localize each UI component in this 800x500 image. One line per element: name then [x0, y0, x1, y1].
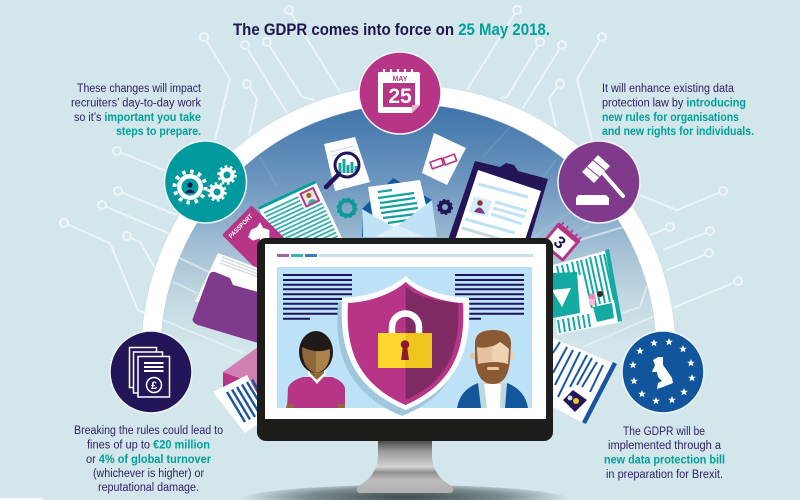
text block: impact on recruiters: so it’s important you take — [74, 112, 201, 124]
screen content panel — [277, 267, 532, 408]
text block: enhance data protection law — [602, 83, 754, 138]
text block: fines: (whichever is higher) or — [93, 468, 204, 480]
icon: teal cog — [338, 198, 356, 218]
text block: enhance data protection law: It will enhance existing data — [602, 83, 735, 95]
document: passport: PASSPORT — [228, 213, 255, 240]
text lines — [283, 275, 524, 319]
dome backdrop — [151, 95, 675, 353]
screen toolbar — [277, 254, 533, 257]
person: right — [457, 330, 528, 408]
text block: data protection bill: The GDPR will be — [623, 426, 705, 438]
title: The GDPR comes into force on 25 May 2018. — [233, 20, 550, 39]
icon: navy cog — [438, 200, 452, 214]
text block: impact on recruiters: recruiters’ day-to-day work — [71, 98, 201, 110]
text block: enhance data protection law: protection law by introducing — [602, 98, 746, 110]
text block: fines: Breaking the rules could lead to — [74, 425, 223, 437]
icon circle: calendar: 25 — [388, 85, 412, 108]
monitor stand — [357, 441, 453, 493]
text block: data protection bill: in preparation for Brexit. — [606, 469, 723, 481]
monitor frame — [257, 238, 553, 441]
text block: data protection bill: new data protection bill — [604, 454, 725, 466]
monitor stand shadow — [240, 485, 570, 500]
document: note with linked boxes — [422, 133, 466, 185]
screen — [265, 244, 546, 419]
text block: impact on recruiters — [71, 83, 202, 138]
text block: enhance data protection law: new rules for organisations — [602, 112, 739, 124]
icon circle: UK and EU stars — [622, 331, 704, 413]
text block: impact on recruiters: These changes will impact — [77, 83, 202, 95]
icon circle: gears — [164, 141, 246, 223]
icon circle: fine documents: £ — [151, 380, 157, 392]
shield — [337, 276, 469, 416]
icon circle: fine documents — [110, 331, 192, 413]
envelope with letter — [362, 178, 437, 237]
text block: fines: fines of up to €20 million — [87, 440, 210, 452]
document: teal news sheet — [552, 249, 622, 335]
text block: enhance data protection law: and new rights for individuals. — [602, 126, 754, 138]
document: open box with striped page — [213, 347, 258, 433]
document: folder — [193, 253, 258, 343]
icon circle: gavel — [558, 141, 640, 223]
text block: fines — [74, 425, 223, 494]
document: blue striped sheet — [553, 338, 617, 424]
text block: impact on recruiters: steps to prepare. — [116, 126, 201, 138]
calendar page: 3: 3 — [550, 232, 569, 253]
calendar page: 3 — [541, 220, 583, 262]
document: passport — [222, 205, 303, 286]
person: left — [286, 331, 345, 408]
text block: fines: or 4% of global turnover — [86, 454, 211, 466]
circuit lines outside the dome — [60, 6, 742, 315]
text block: data protection bill — [604, 426, 725, 481]
clipboard — [448, 161, 548, 240]
icon: padlock — [378, 314, 432, 368]
text block: data protection bill: implemented through a — [608, 440, 722, 452]
icon circle: calendar: MAY — [393, 76, 408, 83]
text block: fines: reputational damage. — [98, 482, 199, 494]
document: CV — [258, 180, 355, 293]
document: magnifier report — [324, 137, 370, 191]
icon circle: calendar — [359, 52, 441, 134]
monitor — [240, 238, 570, 500]
